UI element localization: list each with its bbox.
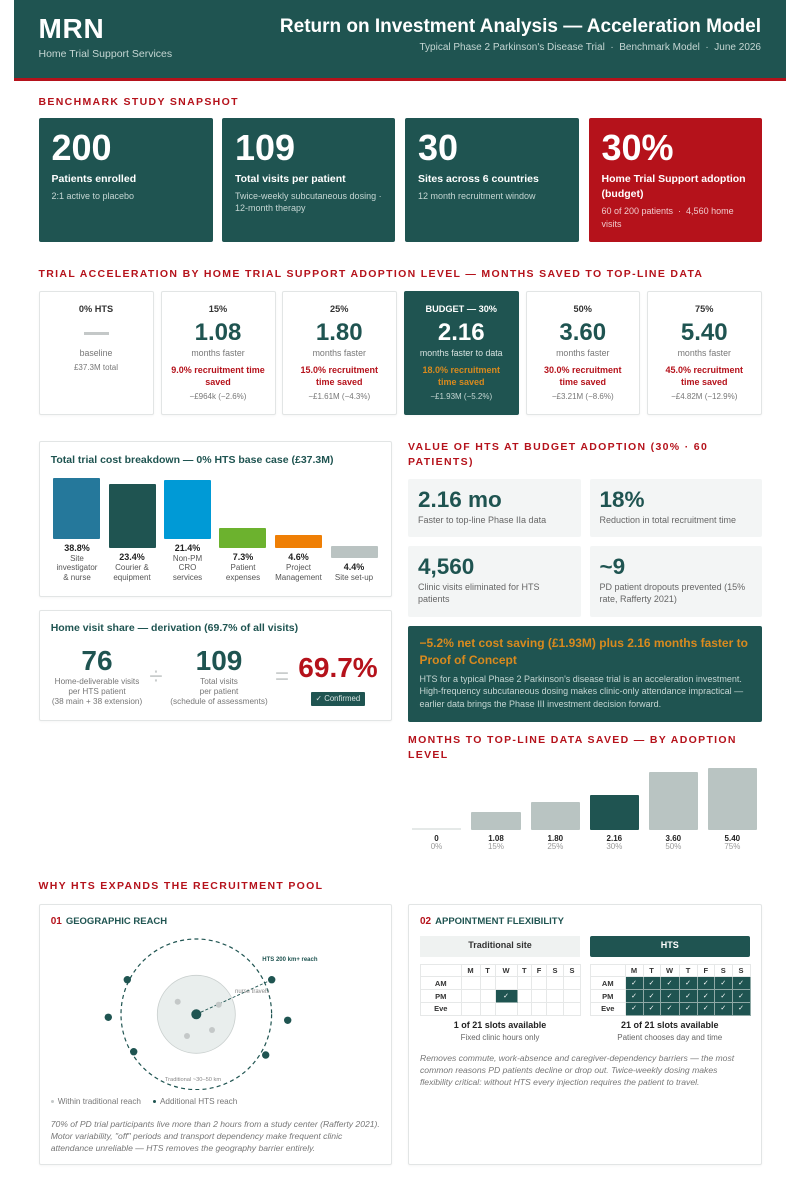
KPI card: patients: Patients enrolled (52, 173, 136, 185)
numerator: 76 (81, 644, 113, 676)
KPI card: adoption: Home Trial Support adoption (budget) (602, 173, 746, 200)
adoption card: 15% (160, 291, 276, 415)
adoption card: 25%: 15.0% recruitment (300, 365, 378, 375)
traditional schedule grid: S (552, 966, 558, 975)
adoption card: 75%: time saved (681, 377, 728, 387)
HTS slot count: 21 of 21 slots available (621, 1020, 719, 1030)
traditional schedule grid: T (522, 966, 527, 975)
adoption card: 25%: months faster (313, 348, 366, 358)
adoption card: budget 30%: time saved (438, 377, 485, 387)
geographic heading: 01 GEOGRAPHIC REACH (51, 916, 167, 926)
adoption card: 15%: 15% (209, 304, 227, 314)
HTS schedule grid: ✓ (703, 993, 709, 1000)
flexibility note: Removes commute, work-absence and caregiver-dependency barriers — the most (420, 1053, 734, 1063)
cost bar chart: Management (275, 573, 322, 582)
cost bar chart: 38.8% (64, 543, 90, 553)
cost bar chart: services (173, 573, 202, 582)
panel: cost breakdown (38, 440, 392, 597)
traditional schedule grid: ✓ (503, 993, 509, 1000)
adoption card: 15%: −£964k (−2.6%) (190, 392, 246, 401)
HTS column header: HTS (661, 940, 679, 950)
adoption card: 75%: months faster (678, 348, 731, 358)
metric card: dropouts: PD patient dropouts prevented (15% rate, Rafferty 2021) (600, 582, 745, 604)
adoption card: 50%: 3.60 (559, 318, 606, 346)
cost bar chart: 21.4% (175, 543, 200, 553)
adoption card: 0%: 0% HTS (79, 304, 113, 314)
metric card: dropouts: ~9 (600, 554, 625, 578)
traditional slot count: 1 of 21 slots available (454, 1020, 546, 1030)
metric card: clinic visits: 4,560 (418, 554, 474, 578)
HTS schedule grid: ✓ (703, 1005, 709, 1012)
HTS schedule grid: ✓ (720, 1005, 726, 1012)
HTS column header (590, 936, 750, 957)
denominator: (schedule of assessments) (170, 697, 268, 706)
bar chart: months saved: 30% (606, 842, 622, 851)
adoption card: 15%: 9.0% recruitment time (171, 365, 265, 375)
callout heading: −5.2% net cost saving (£1.93M) plus 2.16 months faster to Proof of Concept (420, 636, 748, 667)
reach note: attendance unreliable — HTS removes the geography barrier entirely. (51, 1143, 315, 1153)
bar chart: months saved: 0 (434, 834, 439, 842)
bar chart: months saved (412, 768, 757, 851)
HTS schedule grid: ✓ (631, 980, 637, 987)
panel: home visit derivation (38, 610, 392, 720)
cost bar chart: equipment (113, 573, 151, 582)
denominator: Total visits (200, 677, 238, 686)
bar chart: months saved: 1.80 (548, 834, 563, 842)
cost bar chart: CRO (179, 563, 196, 572)
flexibility heading: 02 APPOINTMENT FLEXIBILITY (420, 916, 564, 926)
adoption card: 15%: months faster (191, 348, 245, 358)
metric card: recruitment: Reduction in total recruitment time (600, 515, 736, 525)
traditional column header: Traditional site (468, 940, 532, 950)
cost bar chart: & nurse (63, 573, 91, 582)
cost bar chart: Patient (231, 563, 255, 572)
confirmed badge (311, 692, 365, 706)
KPI card: visits: Total visits per patient (235, 173, 346, 185)
metric card: clinic visits (408, 546, 580, 616)
HTS schedule grid (590, 964, 751, 1016)
callout body: HTS for a typical Phase 2 Parkinson's disease trial is an acceleration investment. (420, 674, 742, 684)
cost bar chart: 23.4% (119, 552, 145, 562)
bar chart: months saved: 75% (724, 842, 740, 851)
adoption card: 50% (526, 291, 640, 415)
bar chart: months saved: 1.08 (488, 834, 504, 842)
KPI card: adoption: 60 of 200 patients · 4,560 home visits (602, 206, 734, 228)
adoption card: budget 30%: 18.0% recruitment (422, 365, 500, 375)
divide sign: ÷ (149, 663, 163, 690)
adoption card: 50%: time saved (559, 377, 606, 387)
HTS schedule grid: ✓ (667, 980, 672, 987)
numerator: per HTS patient (68, 687, 126, 696)
HTS schedule grid: ✓ (649, 1005, 654, 1012)
adoption card: budget 30%: −£1.93M (−5.2%) (430, 392, 492, 401)
bar chart: months saved: 15% (488, 842, 504, 851)
KPI card: visits: 109 (235, 127, 295, 168)
derivation heading: Home visit share — derivation (69.7% of all visits) (51, 622, 298, 634)
HTS schedule grid: ✓ (631, 993, 637, 1000)
cost bar chart: 4.6% (288, 552, 309, 562)
HTS schedule grid: ✓ (649, 993, 654, 1000)
adoption card: 15%: 1.08 (195, 318, 241, 346)
HTS schedule grid: M (631, 966, 637, 975)
cost bar chart: expenses (226, 573, 260, 582)
adoption card: 25%: −£1.61M (−4.3%) (308, 392, 370, 401)
traditional schedule grid: T (485, 966, 490, 975)
bar chart: months saved: 0% (431, 842, 442, 851)
HTS schedule grid: Eve (601, 1004, 614, 1013)
adoption card: 75%: −£4.82M (−12.9%) (671, 392, 737, 401)
HTS schedule grid: ✓ (738, 1005, 744, 1012)
KPI card: visits: Twice-weekly subcutaneous dosing · 12-month therapy (235, 190, 382, 213)
HTS schedule grid: T (686, 966, 690, 975)
metric card: recruitment (590, 478, 762, 536)
metric card: months (408, 478, 580, 536)
adoption card: 75% (647, 291, 762, 415)
equals sign: = (275, 663, 289, 690)
flexibility note: common reasons PD patients decline or drop out. Twice-weekly dosing makes (420, 1065, 717, 1075)
cost bar chart: Non-PM (173, 554, 202, 563)
adoption card: 25%: 1.80 (316, 318, 363, 346)
adoption card: 50%: 30.0% recruitment (544, 365, 622, 375)
adoption card: 25% (282, 291, 396, 415)
panel: appointment flexibility (408, 904, 762, 1165)
traditional schedule grid: AM (435, 979, 447, 988)
callout body (420, 674, 744, 709)
adoption card: 75%: 5.40 (681, 318, 728, 346)
bar chart: months saved: 2.16 (607, 834, 622, 842)
KPI card: sites (405, 118, 579, 242)
adoption card: 75%: 45.0% recruitment (665, 365, 743, 375)
denominator: 109 (196, 644, 242, 676)
cost bar chart: Courier & (115, 563, 149, 572)
adoption card: budget 30%: 2.16 (438, 318, 485, 346)
section heading: snapshot: BENCHMARK STUDY SNAPSHOT (38, 96, 239, 108)
metric card: recruitment: 18% (600, 486, 645, 512)
adoption card: 0% (38, 291, 154, 415)
metric card: months: 2.16 mo (418, 486, 502, 512)
HTS schedule grid: ✓ (685, 993, 691, 1000)
traditional column header (420, 936, 580, 957)
flexibility note: flexibility critical: without HTS every injection requires the patient to travel. (420, 1077, 699, 1087)
HTS schedule grid: ✓ (667, 993, 672, 1000)
HTS schedule grid: ✓ (703, 980, 709, 987)
metric card: months: Faster to top-line Phase IIa data (418, 515, 546, 525)
brand tagline: Home Trial Support Services (38, 48, 172, 60)
HTS schedule grid: ✓ (685, 980, 691, 987)
section heading: acceleration: TRIAL ACCELERATION BY HOME TRIAL SUPPORT ADOPTION LEVEL — MONTHS SAVED TO TOP-LINE DATA (38, 268, 703, 280)
cost bar chart: investigator (57, 563, 97, 572)
traditional schedule grid: M (467, 966, 474, 975)
flexibility note (420, 1053, 734, 1087)
result: 69.7% (298, 652, 378, 683)
reach note (50, 1119, 380, 1153)
cost bar chart: 4.4% (344, 562, 364, 572)
HTS schedule grid: W (666, 966, 673, 975)
traditional schedule grid: PM (435, 992, 446, 1001)
bar chart: months saved: 50% (665, 842, 681, 851)
KPI card: sites: 30 (418, 127, 458, 168)
reach diagram: nurse travels (235, 989, 269, 995)
callout body: earlier data brings the Phase III investment decision forward. (420, 699, 661, 709)
HTS schedule grid: ✓ (667, 1005, 672, 1012)
confirmed badge: ✓ Confirmed (316, 694, 360, 703)
HTS schedule grid: ✓ (738, 993, 744, 1000)
reach diagram (104, 938, 318, 1090)
bar chart: months saved: 3.60 (666, 834, 681, 842)
cost bar chart: Project (286, 563, 311, 572)
KPI card: sites: Sites across 6 countries (418, 173, 539, 185)
report subtitle: Typical Phase 2 Parkinson's Disease Trial · Benchmark Model · June 2026 (419, 42, 761, 52)
metric card: clinic visits: Clinic visits eliminated for HTS patients (418, 582, 540, 604)
reach diagram: HTS 200 km+ reach (262, 957, 318, 963)
traditional schedule grid (420, 964, 581, 1016)
adoption card: budget 30%: BUDGET — 30% (426, 304, 497, 314)
HTS schedule grid: ✓ (738, 980, 744, 987)
reach note: Motor variability, "off" periods and transport dependency make frequent clinic (51, 1131, 342, 1141)
cost breakdown heading: Total trial cost breakdown — 0% HTS base case (£37.3M) (51, 454, 334, 466)
HTS schedule grid: ✓ (649, 980, 654, 987)
metric card: dropouts (590, 546, 762, 616)
callout: net saving (408, 626, 762, 722)
numerator (52, 644, 142, 706)
HTS schedule grid: S (721, 966, 726, 975)
HTS schedule grid: S (738, 966, 744, 975)
adoption card: budget 30%: months faster to data (420, 348, 503, 358)
reach legend: Within traditional reach Additional HTS reach (58, 1097, 237, 1106)
adoption card: 0%: baseline (80, 348, 112, 358)
HTS schedule grid: PM (602, 992, 613, 1001)
adoption card: 50%: −£3.21M (−8.6%) (552, 392, 614, 401)
reach note: 70% of PD trial participants live more than 2 hours from a study center (Rafferty 2021). (51, 1119, 380, 1129)
HTS schedule grid: T (649, 966, 654, 975)
HTS schedule grid: ✓ (685, 1005, 691, 1012)
HTS schedule grid: ✓ (720, 980, 726, 987)
traditional slot note: Fixed clinic hours only (461, 1032, 539, 1042)
HTS schedule grid: ✓ (631, 1005, 637, 1012)
bar chart: months saved: 5.40 (725, 834, 740, 842)
cost bar chart: 7.3% (233, 552, 253, 562)
callout body: High-frequency subcutaneous dosing makes clinic-only attendance impractical — (420, 686, 743, 696)
KPI card: adoption (588, 118, 762, 242)
adoption card: 25%: 25% (330, 304, 348, 314)
numerator: (38 main + 38 extension) (52, 697, 142, 706)
KPI card: sites: 12 month recruitment window (418, 190, 536, 200)
bar chart: months saved: 25% (547, 842, 563, 851)
adoption card: 25%: time saved (316, 377, 363, 387)
numerator: Home-deliverable visits (55, 677, 139, 686)
HTS schedule grid: ✓ (720, 993, 726, 1000)
KPI card: patients (38, 118, 212, 242)
denominator (170, 644, 268, 706)
cost bar chart (53, 478, 378, 582)
traditional schedule grid: S (569, 966, 574, 975)
brand name: MRN (38, 13, 104, 44)
adoption card: budget 30% (404, 291, 518, 415)
HTS slot note: Patient chooses day and time (617, 1032, 722, 1042)
traditional schedule grid: Eve (434, 1004, 447, 1013)
adoption card: 15%: saved (205, 377, 231, 387)
traditional schedule grid: W (502, 966, 510, 975)
header banner (14, 0, 786, 81)
denominator: per patient (200, 687, 238, 696)
KPI card: patients: 2:1 active to placebo (52, 190, 134, 200)
section heading: recruitment pool: WHY HTS EXPANDS THE RECRUITMENT POOL (38, 880, 323, 892)
HTS schedule grid: F (703, 966, 708, 975)
adoption card: 0%: £37.3M total (74, 363, 118, 372)
section heading: months chart: MONTHS TO TOP-LINE DATA SAVED — BY ADOPTION LEVEL (408, 734, 737, 761)
KPI card: patients: 200 (52, 127, 112, 168)
KPI card: adoption: 30% (602, 127, 674, 168)
adoption card: 75%: 75% (695, 304, 713, 314)
panel: geographic reach (38, 904, 392, 1165)
report title: Return on Investment Analysis — Acceleration Model (280, 16, 761, 36)
adoption card: 50%: 50% (574, 304, 592, 314)
section heading: value: VALUE OF HTS AT BUDGET ADOPTION (30% · 60 PATIENTS) (408, 440, 708, 468)
cost bar chart: Site set-up (335, 573, 373, 582)
traditional schedule grid: F (537, 966, 541, 975)
cost bar chart: Site (70, 554, 84, 563)
adoption card: 50%: months faster (556, 348, 609, 358)
KPI card: visits (222, 118, 395, 242)
HTS schedule grid: AM (602, 979, 614, 988)
reach diagram: Traditional ~30–50 km (165, 1077, 221, 1083)
